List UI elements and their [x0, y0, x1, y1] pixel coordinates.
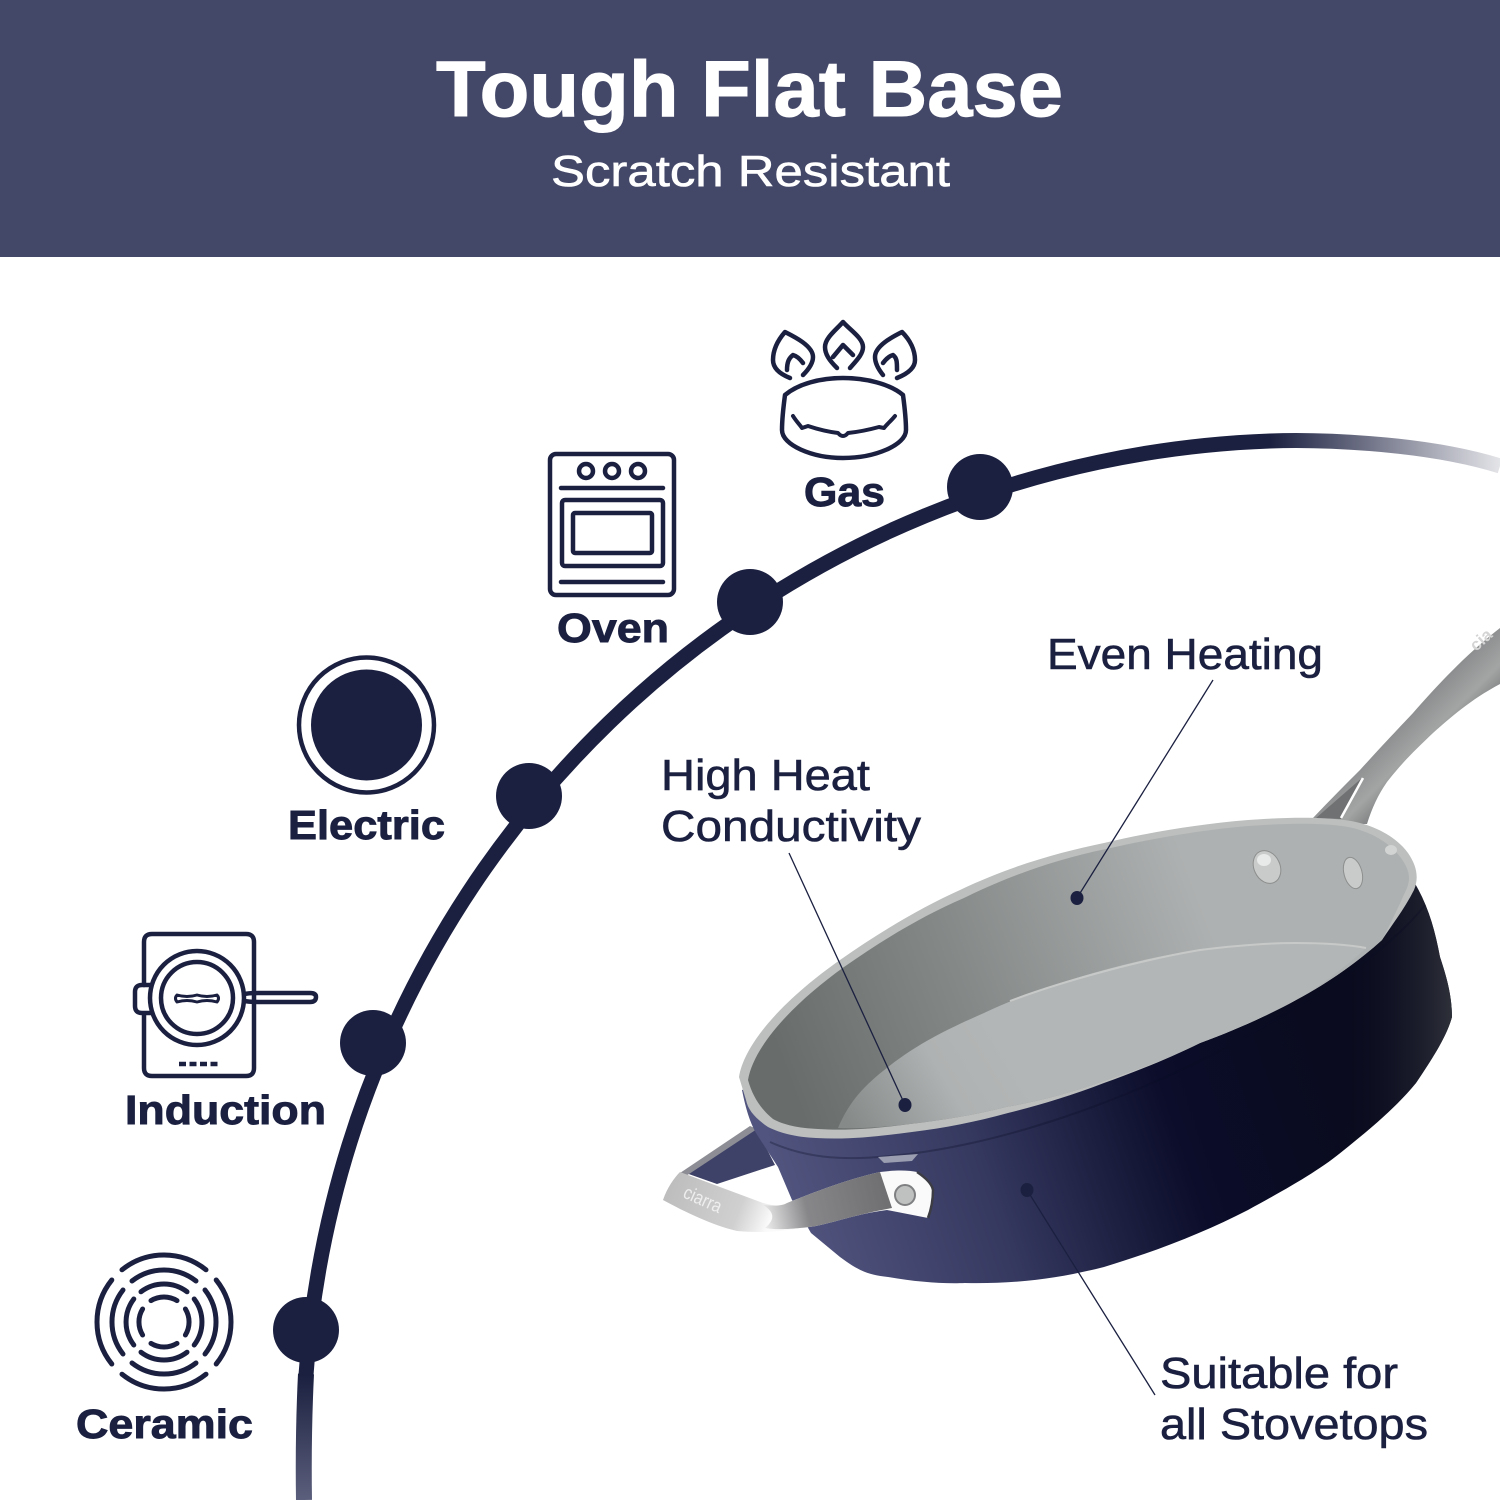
label: Ceramic: Ceramic [76, 1401, 253, 1447]
label: Gas: Gas [804, 469, 885, 515]
callout: Suitable for all Stovetops [1020, 1183, 1428, 1449]
front side handle: ciarra [680, 1182, 725, 1218]
floor edge highlight [1010, 943, 1366, 1001]
label: Electric: Electric [288, 802, 445, 848]
subtitle: Scratch Resistant [551, 147, 950, 196]
front side handle [663, 1170, 933, 1232]
pan floor [838, 943, 1366, 1128]
callout: High Heat Conductivity [661, 751, 921, 1112]
long handle [1313, 625, 1500, 824]
curved pan-edge timeline with stovetop markers [273, 441, 1500, 1500]
illustration: saute pan [663, 625, 1500, 1283]
icon: ceramic radiant rings [97, 1255, 231, 1389]
icon: gas burner [773, 322, 915, 458]
header banner [0, 0, 1500, 257]
icon: oven [550, 454, 674, 595]
rim [739, 818, 1417, 1139]
icon: induction hob with pan [135, 934, 316, 1076]
callout: Even Heating: Even Heating [1047, 630, 1323, 679]
callout: Suitable for all Stovetops: all Stovetops [1160, 1400, 1428, 1449]
label: Induction: Induction [125, 1087, 326, 1133]
label: Oven: Oven [557, 605, 669, 651]
icon: electric hob [299, 658, 434, 792]
callout: High Heat Conductivity: Conductivity [661, 802, 921, 851]
back loop handle arm [680, 1126, 775, 1184]
interior wall [748, 824, 1409, 1130]
pan body [742, 882, 1452, 1283]
interior rivets [1248, 845, 1397, 891]
callout: Even Heating [1047, 630, 1323, 905]
callout: Suitable for all Stovetops: Suitable for [1160, 1349, 1398, 1398]
callout: High Heat Conductivity: High Heat [661, 751, 870, 800]
title: Tough Flat Base [436, 44, 1063, 133]
long handle: cia [1466, 625, 1497, 655]
